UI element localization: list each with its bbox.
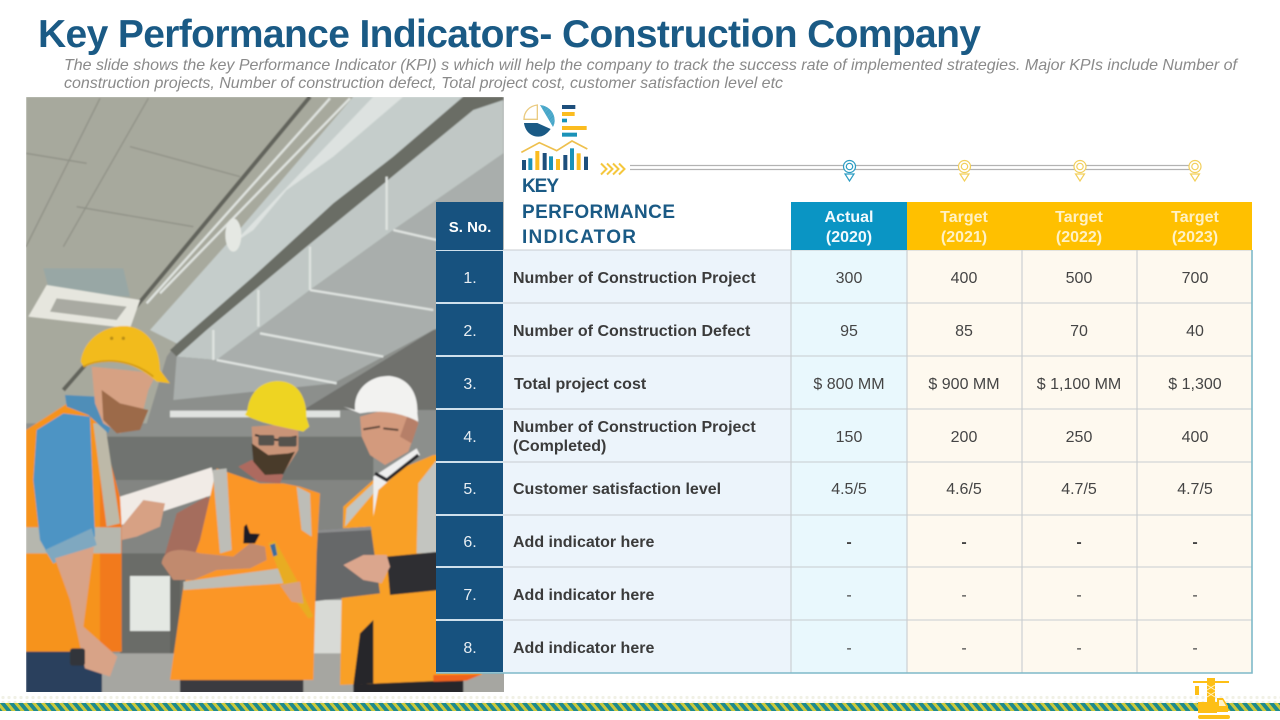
- row 4: 400: [1182, 429, 1208, 446]
- row 3: Total project cost: [514, 376, 647, 393]
- table header row: Target: [1171, 209, 1220, 226]
- row 3: $ 800 MM: [813, 376, 885, 393]
- row 6: -: [961, 534, 967, 551]
- row 4: 200: [951, 429, 977, 446]
- row 3: $ 1,300: [1168, 376, 1222, 393]
- worker middle: [162, 381, 320, 693]
- row 4: 250: [1066, 429, 1092, 446]
- serial number column: 5.: [463, 481, 477, 498]
- row 8: -: [961, 640, 967, 657]
- row 6: -: [846, 534, 852, 551]
- table header row: (2020): [826, 229, 872, 246]
- row 5: 4.5/5: [831, 481, 867, 498]
- description text: construction projects, Number of construction defect, Total project cost, customer satisfaction level etc: [64, 75, 783, 92]
- row 5: 4.7/5: [1061, 481, 1097, 498]
- worker left: [26, 395, 217, 693]
- row 8: -: [1192, 640, 1198, 657]
- ceiling and ducts: [26, 97, 503, 423]
- description text: The slide shows the key Performance Indicator (KPI) s which will help the company to track the success rate of implemented strategies. Major KPIs include Number of: [64, 57, 1239, 74]
- serial number column: 2.: [463, 323, 477, 340]
- row 5: 4.7/5: [1177, 481, 1213, 498]
- arrow: chevrons: [601, 164, 624, 174]
- row 7: -: [846, 587, 852, 604]
- row 2: [513, 323, 1204, 340]
- row 6: [513, 534, 1198, 551]
- row 5: [513, 481, 1213, 498]
- row 8: -: [1076, 640, 1082, 657]
- worker right: [314, 374, 482, 692]
- row 2: Number of Construction Defect: [513, 323, 751, 340]
- icon: timeline pin 2023: [1189, 160, 1201, 181]
- title: Key Performance Indicators- Construction Company: [38, 13, 981, 56]
- row 1: [513, 270, 1208, 287]
- serial number column: 3.: [463, 376, 477, 393]
- heading: key performance indicator: INDICATOR: [522, 227, 636, 248]
- row 7: -: [1192, 587, 1198, 604]
- row 4: [513, 419, 1208, 455]
- photo: construction workers on site: [26, 97, 506, 693]
- row 2: 40: [1186, 323, 1204, 340]
- serial number column: 4.: [463, 429, 477, 446]
- row 1: 300: [836, 270, 862, 287]
- row 2: 85: [955, 323, 973, 340]
- row 2: 95: [840, 323, 858, 340]
- table header row: S. No.: [449, 219, 491, 236]
- row 4: Number of Construction Project: [513, 419, 756, 436]
- description text: [64, 57, 1239, 92]
- row 7: -: [961, 587, 967, 604]
- row 5: Customer satisfaction level: [513, 481, 721, 498]
- icon: crane vehicle: [1193, 678, 1230, 719]
- background of site: [101, 410, 504, 692]
- table header row: (2021): [941, 229, 987, 246]
- table header row: Target: [940, 209, 989, 226]
- table grid: [503, 250, 1252, 673]
- icon: timeline pin 2022: [1074, 160, 1086, 181]
- serial number column: 7.: [463, 587, 477, 604]
- table header row: (2022): [1056, 229, 1102, 246]
- icon: horizontal bars: [562, 105, 587, 137]
- row 3: $ 1,100 MM: [1037, 376, 1121, 393]
- row 6: -: [1192, 534, 1198, 551]
- heading: key performance indicator: [522, 176, 675, 248]
- row 8: Add indicator here: [513, 640, 654, 657]
- icon: timeline pin 2021: [958, 160, 970, 181]
- row 8: -: [846, 640, 852, 657]
- row 4: 150: [836, 429, 862, 446]
- serial number column: [436, 251, 503, 672]
- row 8: [513, 640, 1198, 657]
- icon: pie chart: [524, 105, 555, 137]
- row 5: 4.6/5: [946, 481, 982, 498]
- heading: key performance indicator: KEY: [522, 176, 559, 197]
- row 1: Number of Construction Project: [513, 270, 756, 287]
- row 1: 400: [951, 270, 977, 287]
- table header row: Target: [1055, 209, 1104, 226]
- serial number column: 6.: [463, 534, 477, 551]
- row 6: Add indicator here: [513, 534, 654, 551]
- KPI table: [436, 202, 1252, 673]
- row 4: (Completed): [513, 438, 606, 455]
- row 7: [513, 587, 1198, 604]
- row 7: -: [1076, 587, 1082, 604]
- table header row: [436, 202, 1252, 250]
- row 2: 70: [1070, 323, 1088, 340]
- icon: column chart with line: [521, 141, 588, 170]
- icon: timeline pin 2020: [844, 160, 856, 181]
- row 6: -: [1076, 534, 1082, 551]
- head of left worker: [81, 326, 170, 433]
- row 3: $ 900 MM: [928, 376, 1000, 393]
- row 7: Add indicator here: [513, 587, 654, 604]
- icon: KPI charts: [521, 105, 588, 170]
- row 1: 700: [1182, 270, 1208, 287]
- timeline lines: [630, 166, 1190, 170]
- serial number column: 1.: [463, 270, 477, 287]
- table header row: (2023): [1172, 229, 1218, 246]
- serial number column: 8.: [463, 640, 477, 657]
- table header row: Actual: [825, 209, 873, 226]
- footer stripe: [0, 696, 1280, 711]
- row 3: [514, 376, 1222, 393]
- heading: key performance indicator: PERFORMANCE: [522, 202, 675, 223]
- table cell backgrounds: [436, 250, 1252, 673]
- row 1: 500: [1066, 270, 1092, 287]
